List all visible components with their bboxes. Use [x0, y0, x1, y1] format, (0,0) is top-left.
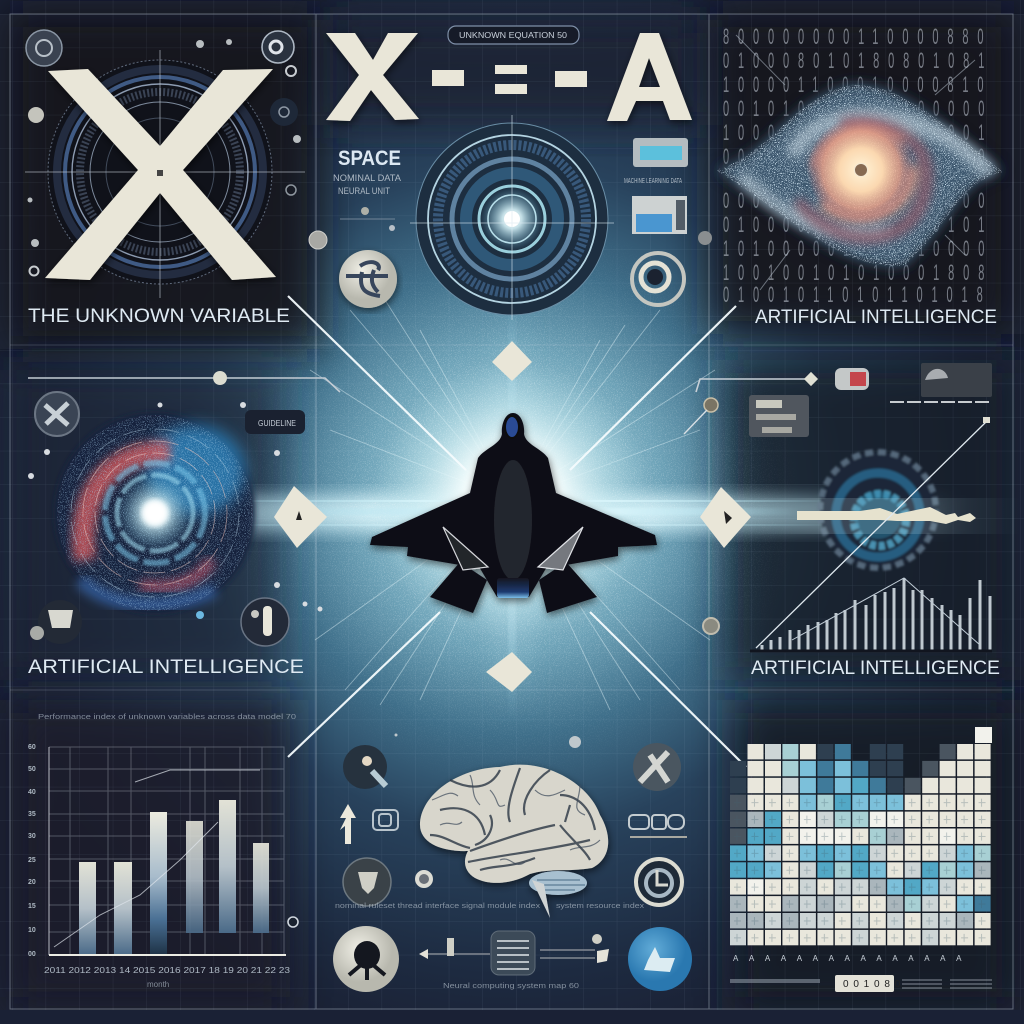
- binary code columns: 010000000000000101: [723, 212, 993, 237]
- y axis labels: 30: [28, 833, 36, 840]
- trend line: [756, 417, 990, 648]
- chart title: Performance index of unknown variables across data model 70: [38, 714, 296, 721]
- dark pointer icon: [343, 745, 387, 789]
- panel: central light burst: [254, 260, 819, 767]
- marker dot: [698, 231, 712, 245]
- panel: space: [309, 115, 712, 320]
- bottom right badge: [241, 598, 289, 646]
- heat cells: [730, 744, 991, 945]
- legend badge: 0 0 1 0 8 0: [843, 979, 901, 990]
- x axis labels: month: [147, 980, 169, 989]
- spiral galaxy: [716, 85, 1003, 266]
- engine glow: [497, 578, 529, 598]
- white button icon: [333, 926, 399, 992]
- x axis labels: [44, 966, 291, 989]
- lens icon: [343, 858, 391, 906]
- scattered nodes: [28, 402, 322, 619]
- diamond right: [700, 487, 751, 548]
- small tag label: [245, 410, 305, 434]
- legend lines: [902, 980, 992, 988]
- pill label: UNKNOWN EQUATION 50: [459, 30, 567, 40]
- text strip: [335, 903, 645, 910]
- capsule icon: [629, 815, 687, 837]
- y axis labels: 60: [28, 744, 36, 751]
- diamond bottom: [486, 652, 532, 692]
- central hull: [494, 460, 532, 580]
- marker dots: [394, 734, 581, 748]
- fan icon: [35, 392, 79, 436]
- ring badge: [636, 859, 682, 905]
- grey crossed icon: [633, 743, 681, 791]
- binary code columns: 010010110101101018: [723, 282, 992, 307]
- binary code columns: 800000000110000880: [723, 24, 992, 49]
- binary code columns: [723, 24, 993, 307]
- binary code columns: 000000000000000000: [723, 188, 993, 213]
- diamond top: [492, 341, 532, 381]
- letter X: [326, 33, 419, 121]
- y axis labels: 35: [28, 811, 36, 818]
- pill label: [448, 26, 579, 44]
- X centre mark: [157, 170, 163, 176]
- rounded square icon: [373, 810, 398, 830]
- direction diamonds: [274, 341, 751, 692]
- arrow up: [340, 804, 356, 844]
- dark image card: [890, 363, 992, 402]
- wings: [370, 493, 657, 570]
- fuselage: [470, 413, 556, 597]
- label: the unknown variable: THE UNKNOWN VARIABLE: [28, 306, 290, 327]
- binary code columns: 000000000000000080: [723, 144, 993, 169]
- first dash: [432, 70, 464, 86]
- panel: bar chart: [28, 714, 298, 989]
- panel: swirling nebula: [28, 371, 340, 678]
- horizontal streak: [720, 498, 1020, 534]
- y axis labels: 50: [28, 766, 36, 773]
- binary code columns: 101000001000010000: [723, 236, 993, 261]
- x axis: [49, 954, 286, 956]
- column labels: AAAAAAAAAAAAAAA: [733, 954, 972, 963]
- y axis labels: 40: [28, 789, 36, 796]
- panel: brain and icons: [333, 734, 692, 992]
- right tail fin: [539, 562, 597, 613]
- footer text: Neural computing system map 60: [443, 983, 579, 990]
- chart grid: [49, 747, 284, 955]
- letter A: [607, 33, 692, 121]
- device image card: [632, 196, 687, 234]
- card caption: MACHINE LEARNING DATA: [624, 178, 682, 185]
- y axis labels: 00: [28, 951, 36, 958]
- x axis labels: 2011 2012 2013 14 2015 2016 2017 18 19 20 21 22 23: [44, 966, 291, 975]
- binary code columns: 001010000000100000: [723, 96, 993, 121]
- small side icons: [28, 39, 301, 276]
- left vent fin: [443, 527, 488, 570]
- blue button icon: [628, 927, 692, 991]
- small tag label: GUIDELINE: [258, 419, 296, 428]
- y axis labels: 20: [28, 879, 36, 886]
- panel: heat map grid: [730, 727, 992, 992]
- holographic dial: [820, 452, 936, 568]
- circular dial: [25, 50, 305, 298]
- frequency bar chart: [750, 578, 992, 651]
- legend left: [730, 979, 820, 983]
- equals sign: [495, 65, 527, 94]
- chart bars: [79, 800, 269, 955]
- blue screen card: [633, 138, 688, 167]
- emblem button: [339, 250, 397, 308]
- binary code columns: 100000000000100001: [723, 120, 993, 145]
- dial icon top right: [262, 31, 294, 63]
- connector with knob: [696, 372, 818, 392]
- y axis labels: 15: [28, 903, 36, 910]
- connector lines: [736, 35, 975, 290]
- label: artificial intelligence: ARTIFICIAL INTELLIGENCE: [755, 307, 997, 328]
- small node: [288, 917, 298, 927]
- label: artificial intelligence left: ARTIFICIAL INTELLIGENCE: [28, 657, 304, 678]
- central radar dial: [410, 115, 614, 320]
- device panel icon: [749, 395, 809, 437]
- dial icon top left: [26, 30, 62, 66]
- small marker dots: [309, 207, 395, 249]
- space caption: NOMINAL DATA: [333, 173, 401, 183]
- brain: [420, 765, 608, 918]
- trend line: [54, 770, 260, 947]
- binary code columns: 010008010180801081: [723, 48, 993, 73]
- y axis labels: 25: [28, 857, 36, 864]
- text strip: nominal ruleset thread interface signal module index: [335, 903, 541, 910]
- target ring icon: [632, 253, 684, 305]
- text strip: system resource index: [556, 903, 645, 910]
- panel: right data dial: [684, 363, 1020, 679]
- label: artificial intelligence right: ARTIFICIAL INTELLIGENCE: [751, 658, 1000, 679]
- big X letter: [45, 69, 276, 280]
- cockpit: [505, 416, 519, 438]
- heading equation: X = A: [326, 26, 692, 121]
- bottom left badge: [30, 600, 82, 644]
- right vent fin: [538, 527, 583, 570]
- diamond left: [274, 486, 327, 548]
- nebula swirl: [55, 413, 255, 613]
- fighter jet: [370, 413, 657, 613]
- red capsule icon: [835, 368, 869, 390]
- binary code columns: 100100101010001808: [723, 260, 993, 285]
- second dash: [555, 71, 587, 87]
- space heading: SPACE: [338, 147, 401, 170]
- slider control: [419, 931, 609, 975]
- legend badge: [835, 975, 901, 992]
- y axis labels: [28, 744, 36, 958]
- panel: the unknown variable: [25, 30, 305, 327]
- space caption: [333, 173, 401, 196]
- space caption: NEURAL UNIT: [338, 186, 390, 196]
- small marker: [703, 618, 719, 634]
- white bone bar: [797, 507, 976, 524]
- y axis labels: 10: [28, 927, 36, 934]
- left tail fin: [430, 562, 487, 613]
- small ring: [417, 872, 431, 886]
- binary code columns: 100001100010000810: [723, 72, 992, 97]
- gauge node: [684, 398, 718, 434]
- slider line: [28, 371, 340, 392]
- panel: galaxy and binary code: [716, 24, 1003, 328]
